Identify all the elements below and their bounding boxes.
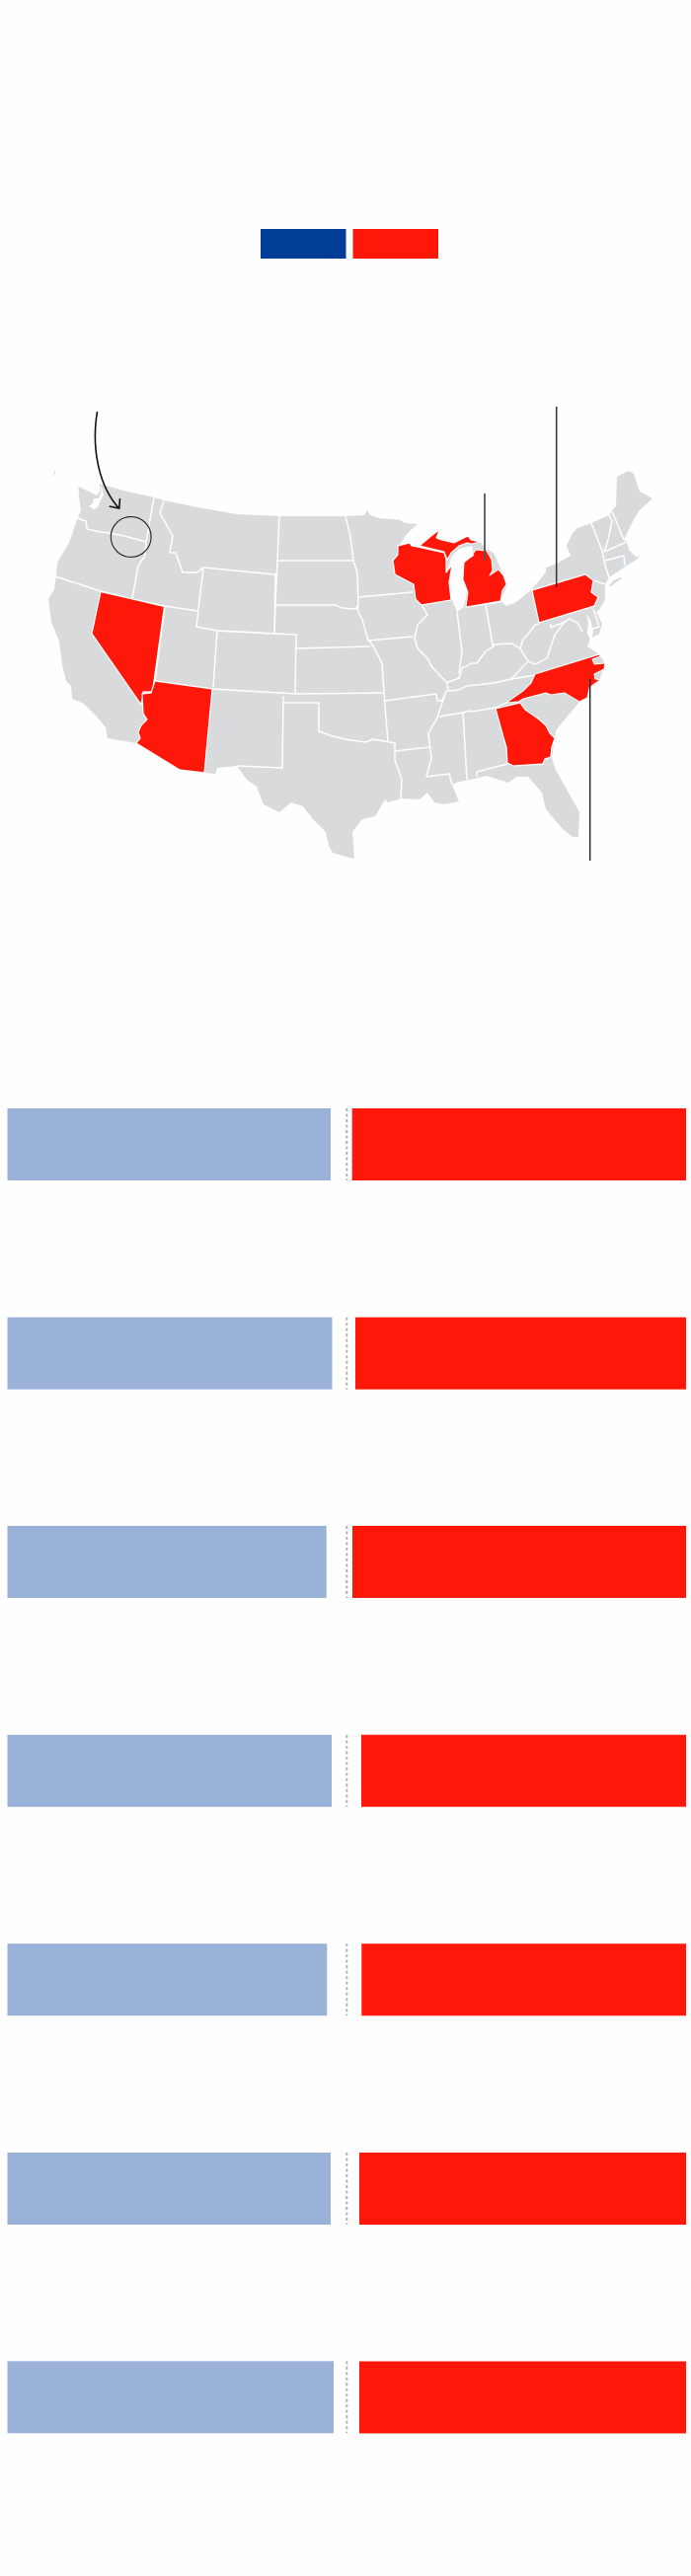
row 6 blue bar [8, 2153, 331, 2225]
row 1 midpoint line [346, 1108, 347, 1180]
puget sound notch [89, 484, 104, 509]
legend swatch: blue [261, 229, 346, 259]
row 2 blue bar [8, 1318, 332, 1390]
row 1 blue bar [8, 1108, 331, 1180]
swing state: pennsylvania [532, 574, 598, 623]
row 2: Georgia [8, 1318, 686, 1390]
row 3 midpoint line [346, 1526, 347, 1598]
leader line: North Carolina [589, 679, 591, 861]
row 1 red bar [352, 1108, 686, 1180]
long island [609, 577, 622, 586]
swing state: north carolina [506, 654, 605, 703]
leader line: Pennsylvania [556, 407, 558, 587]
row 7 blue bar [8, 2361, 334, 2433]
row 1: Arizona [8, 1108, 686, 1180]
swing state: michigan [420, 530, 506, 607]
row 4 red bar [361, 1735, 686, 1807]
chesapeake bay [586, 614, 593, 642]
arrow head [110, 498, 120, 508]
state borders [55, 497, 627, 799]
row 5 blue bar [8, 1943, 327, 2015]
row 4: Nevada [8, 1735, 686, 1807]
row 6 red bar [359, 2153, 686, 2225]
row 5 midpoint line [346, 1943, 347, 2015]
arrow pointing to highlighted border [95, 412, 120, 508]
row 3 red bar [352, 1526, 686, 1598]
michigan lower peninsula [463, 550, 506, 607]
row 5 red bar [361, 1943, 686, 2015]
row 6: Pennsylvania [8, 2153, 686, 2225]
swing state: nevada [92, 592, 164, 705]
swing state: arizona [136, 681, 212, 773]
row 7 red bar [359, 2361, 686, 2434]
results rows [8, 1108, 686, 2434]
swing state: wisconsin [393, 543, 452, 605]
row 7: Wisconsin [8, 2361, 686, 2434]
row 2 red bar [355, 1318, 686, 1390]
small island mark [53, 471, 55, 475]
lake michigan [445, 546, 474, 612]
swing state: georgia [496, 703, 555, 766]
land silhouette [48, 471, 653, 859]
row 3 blue bar [8, 1526, 327, 1598]
rhode island water detail [625, 559, 628, 566]
row 7 midpoint line [346, 2361, 347, 2433]
annotation circle on the Washington-Oregon border [111, 517, 151, 557]
row 4 midpoint line [346, 1735, 347, 1807]
row 5: North Carolina [8, 1943, 686, 2015]
row 4 blue bar [8, 1735, 332, 1807]
map of the United States [48, 471, 653, 859]
arrow shaft [95, 412, 118, 508]
row 2 midpoint line [346, 1318, 347, 1390]
row 3: Michigan [8, 1526, 686, 1598]
legend [261, 229, 438, 259]
leader line: Michigan [484, 493, 486, 561]
row 6 midpoint line [346, 2153, 347, 2225]
legend swatch: red [353, 229, 438, 259]
michigan upper peninsula [420, 530, 480, 560]
